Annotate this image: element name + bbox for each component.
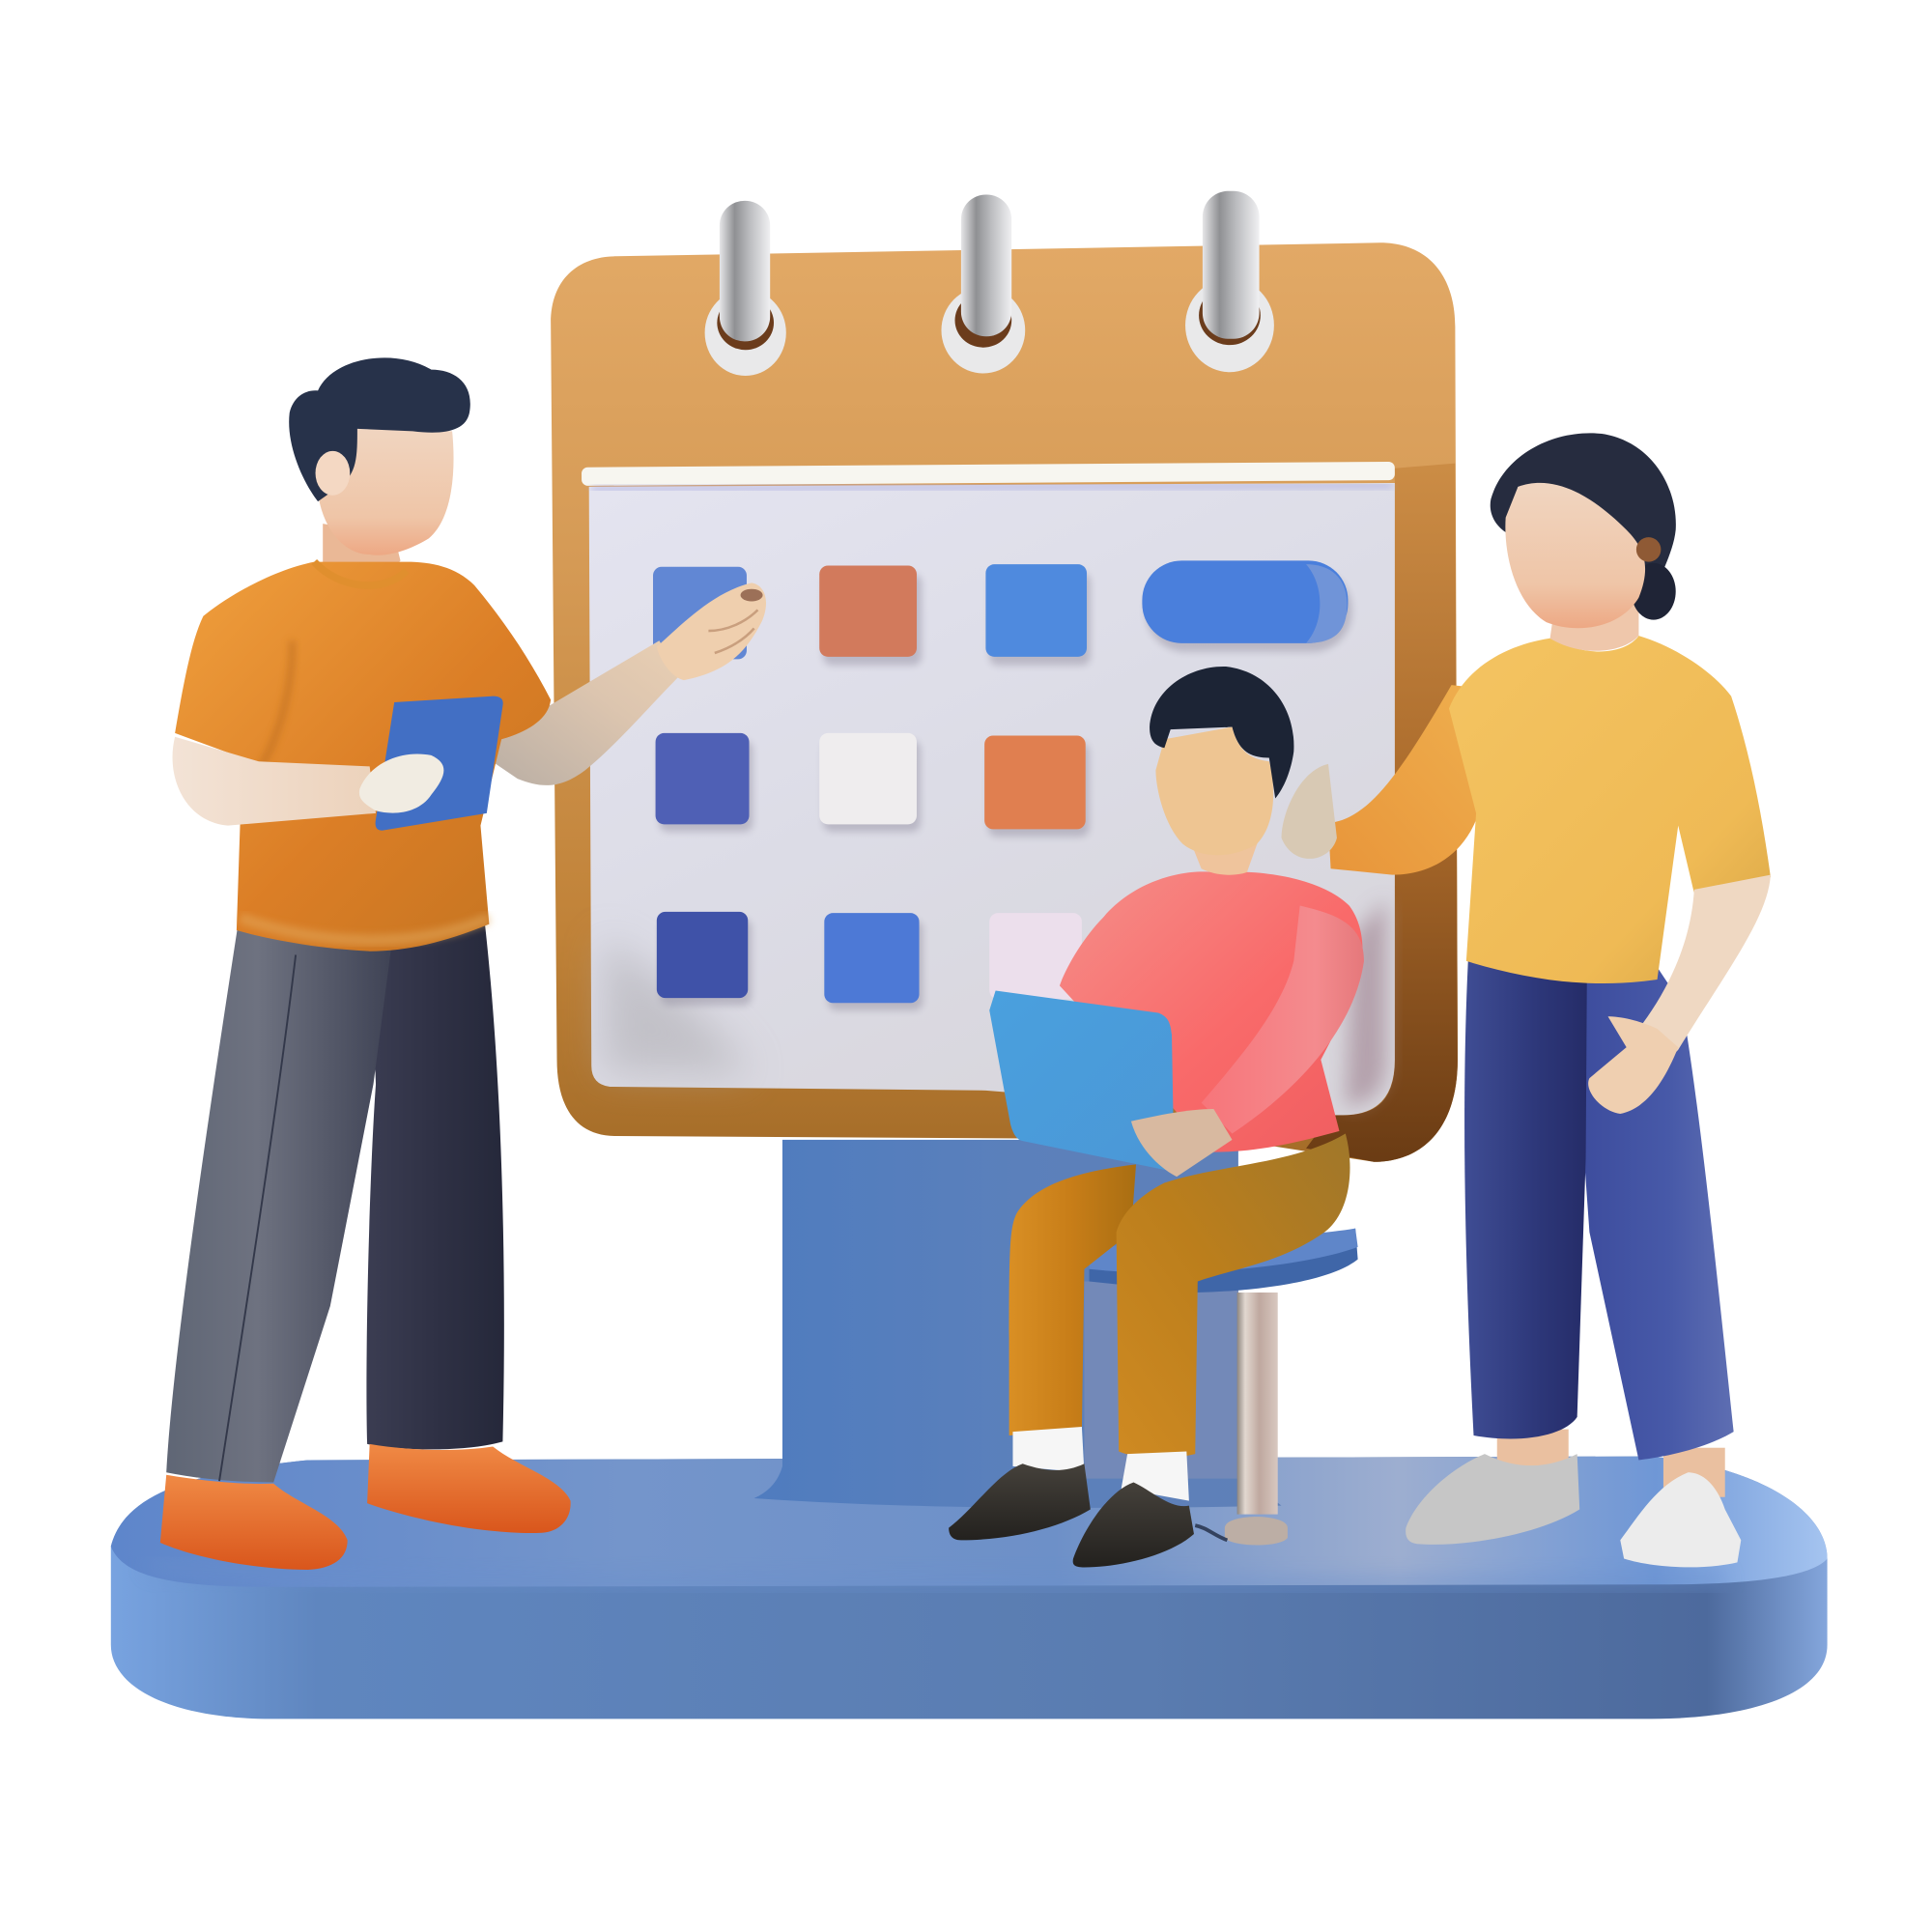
calendar rings bbox=[705, 191, 1274, 376]
hair clip bbox=[1636, 537, 1661, 562]
platform base bbox=[111, 1457, 1828, 1719]
back leg bbox=[1009, 1164, 1136, 1435]
orange shirt bbox=[175, 562, 551, 952]
left arm bbox=[173, 737, 376, 826]
stool bbox=[1090, 1229, 1358, 1545]
blue tablet bbox=[989, 991, 1175, 1172]
hand on tablet bbox=[1131, 1109, 1233, 1177]
hair bbox=[1491, 433, 1676, 604]
hair bbox=[289, 357, 470, 501]
person: standing woman bbox=[1282, 433, 1771, 1567]
shoe front bbox=[1073, 1482, 1194, 1567]
hand on tablet bbox=[359, 753, 443, 813]
front leg bbox=[1117, 1133, 1350, 1459]
sock front bbox=[1122, 1452, 1189, 1501]
person: standing man bbox=[160, 357, 766, 1570]
head bbox=[1505, 483, 1645, 628]
ankles bbox=[1497, 1430, 1725, 1497]
hand on shoulder bbox=[1282, 764, 1337, 859]
tile shadows bbox=[659, 569, 1351, 1010]
sock back bbox=[1012, 1427, 1084, 1472]
calendar top bar bbox=[582, 462, 1395, 486]
hair bbox=[1150, 667, 1293, 799]
pointing arm bbox=[487, 640, 680, 785]
pointing hand bbox=[657, 582, 766, 680]
tile row 2 bbox=[656, 733, 1086, 829]
red sweater body bbox=[1060, 871, 1363, 1152]
trousers bbox=[166, 918, 504, 1482]
pointing arm sleeve bbox=[1328, 685, 1497, 875]
tile row 3 bbox=[657, 912, 1082, 1003]
shoes bbox=[160, 1444, 571, 1570]
tile row 1 bbox=[653, 560, 1348, 659]
right hand bbox=[1588, 1016, 1678, 1114]
yellow shirt bbox=[1449, 636, 1771, 983]
head bbox=[1155, 727, 1273, 855]
calendar sheet bbox=[589, 483, 1395, 1115]
shoe back bbox=[949, 1463, 1091, 1540]
head bbox=[318, 429, 454, 555]
sweater sleeve bbox=[1202, 906, 1364, 1133]
navy trousers bbox=[1464, 949, 1734, 1460]
hair bun bbox=[1632, 563, 1676, 620]
calendar board bbox=[551, 242, 1458, 1162]
neck bbox=[323, 524, 401, 577]
calendar stand bbox=[754, 1140, 1282, 1508]
neck bbox=[1189, 838, 1260, 875]
neck bbox=[1550, 604, 1638, 651]
tablet bbox=[376, 696, 503, 831]
shoes bbox=[1406, 1454, 1741, 1567]
person: seated man bbox=[949, 667, 1364, 1567]
ear bbox=[316, 451, 350, 496]
right arm bbox=[1634, 875, 1771, 1084]
